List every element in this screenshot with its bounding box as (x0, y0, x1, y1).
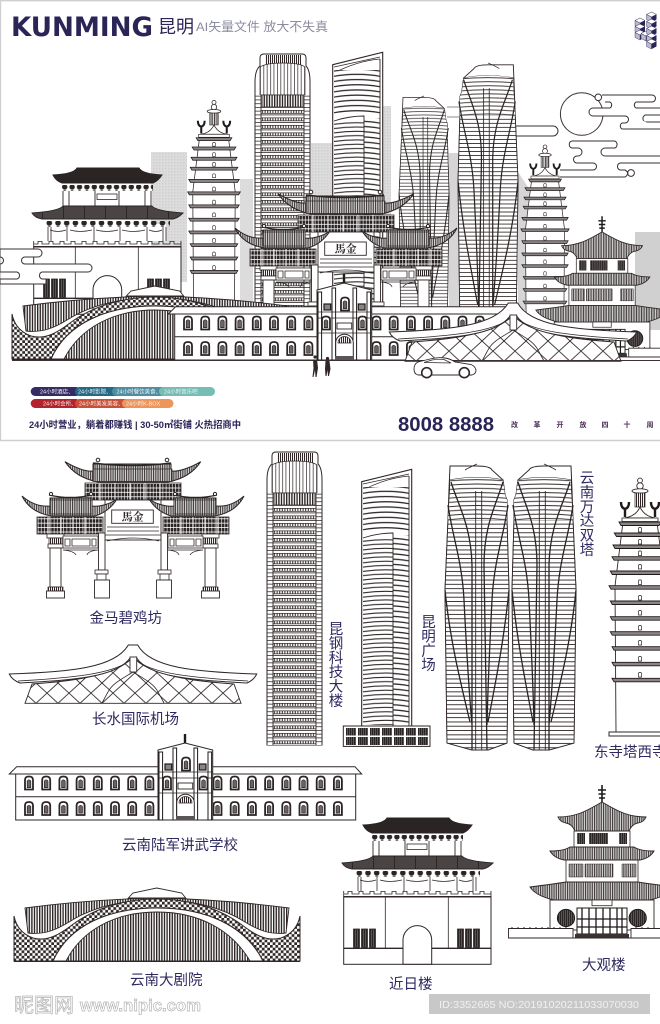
昆钢科技大楼 (267, 452, 322, 745)
building: 昆明广场 (314, 52, 401, 329)
label: 云南万达双塔: 双 (580, 528, 594, 545)
title: 昆明: 昆明 (158, 17, 194, 37)
东寺塔西寺塔 (609, 478, 660, 736)
figures: pedestrians (312, 355, 330, 377)
label: 云南万达双塔: 塔 (580, 542, 595, 559)
tag pills: row 2 (31, 399, 174, 408)
label: 昆钢科技大楼: 大 (329, 679, 343, 696)
watermark: nipic (14, 995, 201, 1017)
ground line (12, 360, 660, 362)
building: 长水国际机场 (389, 303, 637, 361)
building: 大观楼 (516, 216, 660, 357)
长水国际机场 (9, 645, 257, 703)
label: 昆明广场 (421, 615, 436, 674)
tagline: 放 (580, 420, 586, 429)
building: 金马碧鸡坊: 馬金 (335, 242, 357, 256)
label: 昆明广场: 场 (421, 657, 436, 674)
gray background buildings (151, 106, 660, 330)
金马碧鸡坊: 馬金 (122, 510, 144, 524)
大观楼 (508, 785, 660, 938)
label: 大观楼: 大观楼 (582, 957, 626, 974)
tagline: 十 (624, 420, 630, 429)
金马碧鸡坊 (22, 458, 244, 598)
label: 昆钢科技大楼: 昆 (329, 622, 343, 638)
tag pills: row 2: 24小时美发美容、 (79, 400, 124, 408)
label: 昆钢科技大楼: 钢 (329, 635, 343, 652)
label: 昆钢科技大楼: 科 (329, 650, 343, 667)
building: 东寺塔 (188, 100, 240, 320)
building: 讲武学校 (168, 274, 521, 360)
label: 云南万达双塔: 达 (580, 513, 594, 530)
slogan: 24小时营业，躺着都赚钱 | 30-50㎡街铺 火热招商中 (29, 419, 241, 431)
云南万达双塔 (445, 464, 576, 750)
label: 云南万达双塔 (580, 471, 595, 559)
label: 云南万达双塔: 南 (580, 484, 594, 501)
title: KUNMING: KUNMING (11, 12, 153, 43)
building: 金马碧鸡坊 (235, 190, 457, 330)
云南大剧院 (14, 888, 300, 962)
tagline: 开 (556, 421, 564, 429)
tag pills: row 1: 24小时餐饮美食、 (116, 388, 161, 396)
tag pills: row 1: 24小时影院、 (78, 388, 112, 396)
label: 云南万达双塔: 万 (580, 500, 594, 516)
tag pills: row 1: 24小时酒店、 (40, 388, 74, 396)
label: 金马碧鸡坊: 金马碧鸡坊 (90, 610, 162, 627)
label: 云南万达双塔: 云 (580, 471, 594, 487)
label: 昆钢科技大楼: 楼 (329, 693, 343, 710)
moon and clouds (515, 93, 660, 177)
car (414, 358, 476, 378)
left clouds (0, 249, 92, 284)
watermark: id strip: ID:3352665 NO:20191020211033070030 (439, 1000, 639, 1011)
watermark: id strip (429, 994, 650, 1014)
label: 昆钢科技大楼: 技 (329, 664, 343, 681)
tagline: 四 (602, 421, 608, 429)
panel: building catalogue (9, 452, 660, 993)
tag pills: row 1 (31, 387, 215, 396)
label: 云南大剧院: 云南大剧院 (130, 972, 203, 989)
watermark: nipic: www.nipic.com (79, 996, 201, 1015)
building: 近日楼 (32, 168, 183, 314)
building: 万达 west tower (399, 96, 449, 319)
building: 昆钢科技大楼 (255, 54, 310, 347)
label: 云南陆军讲武学校: 云南陆军讲武学校 (122, 837, 238, 854)
building: 西寺塔 (521, 145, 569, 346)
label: 近日楼: 近日楼 (389, 976, 432, 993)
panel frame (0, 1, 660, 441)
tagline: 周 (646, 421, 654, 429)
tag pills: row 2: 24小时K-BOX (126, 400, 161, 408)
tagline: 改 (511, 420, 518, 429)
昆明广场 (343, 469, 430, 746)
icon: cube logo (635, 12, 656, 49)
tagline: 革 (534, 420, 540, 429)
tag pills: row 2: 24小时会所、 (43, 400, 77, 408)
label: 昆明广场: 昆 (421, 615, 436, 631)
label: 长水国际机场: 长水国际机场 (92, 711, 179, 728)
subtitle: AI矢量文件 放大不失真 (196, 19, 328, 34)
building: 万达 east tower (458, 63, 518, 331)
云南陆军讲武学校 (9, 734, 362, 820)
panel: city skyline poster (0, 1, 660, 441)
tagline (511, 420, 654, 429)
phone number: 8008 8888 (398, 414, 494, 436)
building: 云南大剧院 (12, 286, 298, 360)
label: 昆钢科技大楼 (329, 622, 343, 710)
近日楼 (342, 818, 493, 964)
watermark: nipic: 昵图网 (14, 995, 74, 1017)
label: 昆明广场: 广 (421, 643, 436, 660)
label: 昆明广场: 明 (421, 629, 436, 645)
tag pills: row 1: 24小时音乐吧 (164, 388, 198, 396)
